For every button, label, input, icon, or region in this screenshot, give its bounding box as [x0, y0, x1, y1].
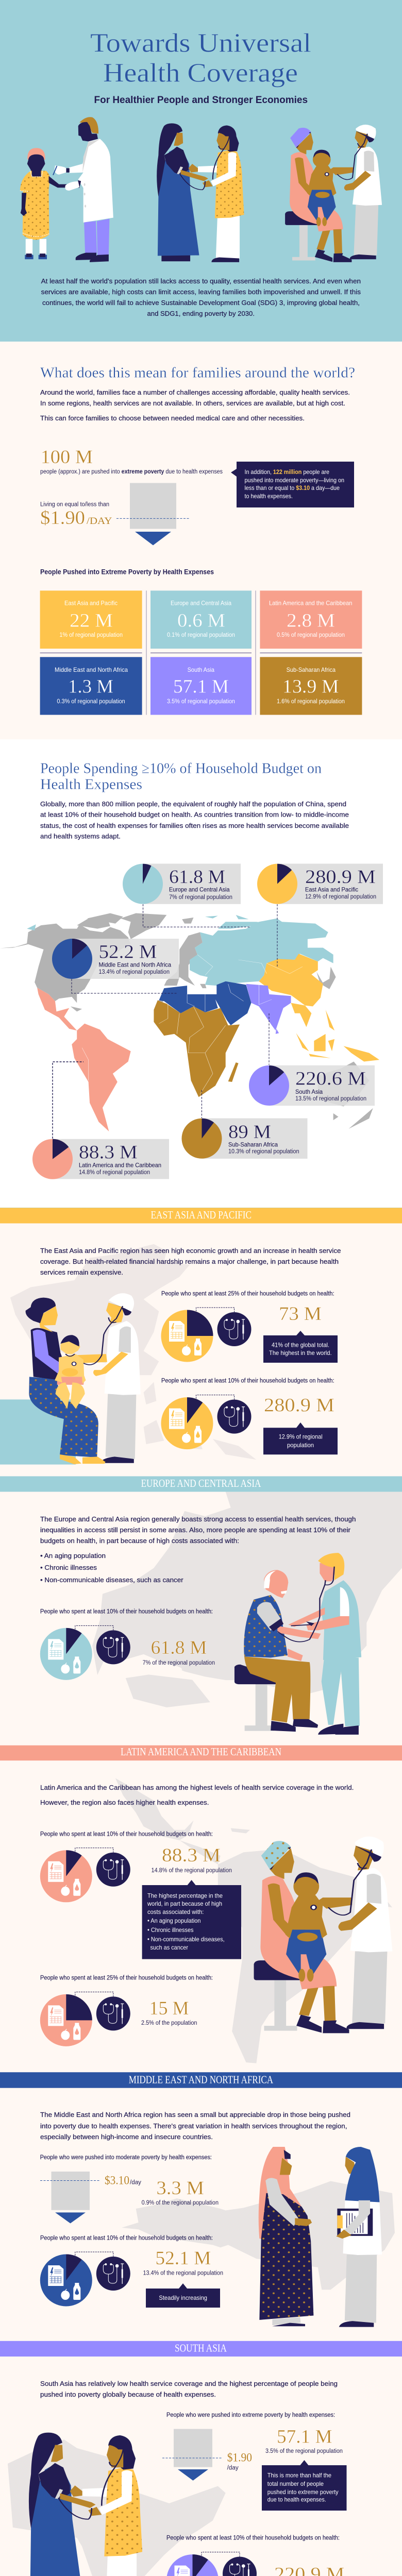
tile: Europe and Central Asia: 0.1% of regional population	[167, 632, 235, 638]
body text: The Europe and Central Asia region generally boasts strong access to essential health services, though	[40, 1515, 356, 1523]
callout: Latin America and the Caribbean: 14.8% of regional population	[79, 1170, 150, 1176]
stat: 100 M: people (approx.) are pushed into extreme poverty due to health expenses	[40, 469, 223, 475]
body text: at least 10% of their household budget on health. As countries transition from low- to middle-income	[40, 811, 349, 819]
callout: East Asia and Pacific: 12.9% of regional population	[305, 894, 376, 900]
callout: more than half	[262, 2460, 346, 2511]
body text: pushed into poverty globally because of health expenses.	[40, 2391, 216, 2398]
tile: Europe and Central Asia	[150, 590, 252, 649]
body text: This can force families to choose between needed medical care and other necessities.	[40, 414, 305, 422]
banner: MIDDLE EAST AND NORTH AFRICA	[129, 2073, 274, 2086]
stat: 100 M: 100 M	[41, 447, 93, 468]
pie: 10 percent	[40, 1848, 130, 1902]
poverty line graphic	[162, 2429, 252, 2481]
bullet list	[40, 1552, 183, 1584]
callout: Sub-Saharan Africa: 89 M	[228, 1122, 271, 1143]
stat: 61.8 M: 61.8 M	[150, 1637, 207, 1658]
panel: Latin America and the Caribbean	[0, 1745, 402, 2063]
pie: 10 percent	[40, 1625, 130, 1680]
stat label: 25 percent: People who spent at least 25% of their household budgets on health:	[40, 1975, 213, 1981]
poverty line graphic	[40, 483, 190, 545]
heading: People Spending ≥10% of Household Budget on	[40, 760, 322, 776]
poverty line graphic: $1.90	[40, 507, 85, 529]
banner: EAST ASIA AND PACIFIC	[150, 1209, 252, 1221]
tile: Middle East and North Africa: Middle East and North Africa	[55, 666, 128, 673]
callout: Sub-Saharan Africa: 10.3% of regional population	[228, 1149, 299, 1155]
callout: Sub-Saharan Africa: Sub-Saharan Africa	[228, 1141, 278, 1148]
banner: SOUTH ASIA	[175, 2342, 227, 2354]
callout: Sub-Saharan Africa	[181, 1118, 307, 1159]
stat label: 10 percent: People who spent at least 10% of their household budgets on health:	[166, 2535, 340, 2541]
stat label: 10 percent: People who spent at least 10% of their household budgets on health:	[40, 2235, 213, 2242]
subheading: extreme poverty by region: People Pushed into Extreme Poverty by Health Expenses	[40, 568, 214, 576]
body text	[40, 2380, 338, 2398]
tile: East Asia and Pacific: 22 M	[70, 610, 113, 631]
tile: Sub-Saharan Africa: 13.9 M	[282, 676, 339, 698]
illustration: pregnant woman and health worker	[259, 2147, 382, 2327]
panel: what does this mean	[0, 342, 402, 739]
callout: global total: 41% of the global total.	[272, 1342, 329, 1349]
stat: 52.1 M	[143, 2248, 223, 2277]
body text	[40, 1515, 356, 1545]
stat: 88.3 M: 14.8% of the regional population	[152, 1868, 232, 1874]
callout: East Asia and Pacific	[257, 863, 383, 904]
body text: South Asia has relatively low health service coverage and the highest percentage of people being	[40, 2380, 338, 2387]
world map	[0, 913, 379, 1131]
intro text: services are available, high costs can limit access, leaving families both impoverished and unwell. If this	[41, 288, 361, 296]
tile: Middle East and North Africa: 1.3 M	[68, 676, 113, 698]
stat: 3.3 M: 0.9% of the regional population	[142, 2200, 219, 2206]
banner	[0, 1745, 402, 1760]
tile: Latin America and the Caribbean	[260, 590, 362, 649]
banner: EUROPE AND CENTRAL ASIA	[141, 1477, 261, 1489]
tile: Sub-Saharan Africa: 1.6% of regional population	[277, 699, 345, 705]
callout: South Asia: 13.5% of regional population	[295, 1096, 366, 1102]
stat label: 10 percent: People who spent at least 10% of their household budgets on health:	[40, 1609, 213, 1615]
heading: What does this mean for families around the world?	[40, 365, 355, 381]
body text	[40, 2111, 350, 2141]
body text: coverage. But health-related financial hardship remains a major challenge, in part because health	[40, 1258, 339, 1265]
stat: 3.3 M: 3.3 M	[156, 2178, 204, 2199]
banner	[0, 1476, 402, 1492]
poverty line graphic: Living on equal to/less than	[40, 502, 109, 508]
callout: South Asia: 220.6 M	[295, 1068, 366, 1089]
callout: Europe and Central Asia: 61.8 M	[169, 867, 225, 888]
callout: regional population: 12.9% of regional	[279, 1433, 323, 1440]
panel: East Asia and Pacific	[0, 1208, 402, 1465]
intro text	[41, 277, 361, 317]
intro text: and SDG1, ending poverty by 2030.	[147, 310, 255, 317]
intro text: continues, the world will fail to achieve Sustainable Development Goal (SDG) 3, improving global health,	[42, 299, 360, 307]
callout: Latin America and the Caribbean: Latin America and the Caribbean	[79, 1162, 161, 1169]
callout: highest percentage: • An aging population	[147, 1917, 201, 1924]
stat: 52.1 M: 52.1 M	[155, 2248, 211, 2269]
callout: more than half: pushed into extreme poverty	[267, 2488, 339, 2496]
callout: highest percentage: world, in part because of high	[147, 1900, 222, 1907]
map: Latin America	[115, 1778, 392, 2063]
banner: LATIN AMERICA AND THE CARIBBEAN	[121, 1745, 281, 1758]
body text	[40, 388, 350, 422]
callout: highest percentage	[142, 1880, 241, 1959]
intro text: At least half the world's population still lacks access to quality, essential health services. And even when	[41, 277, 361, 285]
tile: Sub-Saharan Africa	[260, 657, 362, 715]
heading: Health Expenses	[40, 776, 142, 792]
regional sections background	[0, 1223, 402, 2576]
panel: South Asia	[0, 2341, 402, 2576]
callout: global total: The highest in the world.	[269, 1349, 332, 1357]
panel: Middle East and North Africa	[0, 2072, 402, 2327]
stat label: moderate poverty: People who were pushed into moderate poverty by health expenses:	[40, 2155, 212, 2161]
pie: 10 percent	[166, 2552, 257, 2576]
map: Middle East	[122, 2181, 395, 2290]
tile: South Asia	[150, 657, 252, 715]
callout: Europe and Central Asia: 7% of regional population	[169, 894, 232, 901]
callout: 122 million	[231, 462, 354, 507]
callout: Europe and Central Asia	[123, 863, 241, 904]
poverty line graphic: /day	[227, 2465, 239, 2471]
stat: 15 M	[141, 1998, 197, 2026]
callout: South Asia: South Asia	[295, 1088, 323, 1095]
body text: The East Asia and Pacific region has seen high economic growth and an increase in health service	[40, 1247, 341, 1255]
callout: steadily increasing: Steadily increasing	[159, 2294, 207, 2301]
bullet list: • Chronic illnesses	[40, 1564, 97, 1571]
map: East Asia	[10, 1244, 256, 1460]
body text	[40, 1247, 341, 1276]
callout: 122 million: less than or equal to $3.10 a day—due	[244, 484, 340, 492]
callout: regional population	[263, 1422, 338, 1454]
stat: 57.1 M	[265, 2427, 343, 2454]
tile: Middle East and North Africa: 0.3% of regional population	[57, 699, 125, 705]
body text: status, the cost of health expenses for families often rises as more health services become available	[40, 822, 349, 829]
callout: East Asia and Pacific: East Asia and Pacific	[305, 886, 358, 893]
body text: services remain expensive.	[40, 1268, 123, 1276]
connector lines	[53, 904, 277, 1139]
poverty line graphic: $3.10	[105, 2174, 129, 2187]
body text: especially between high-income and insecure countries.	[40, 2133, 213, 2141]
stat: 61.8 M: 7% of the regional population	[143, 1660, 215, 1666]
callout: highest percentage: such as cancer	[150, 1944, 188, 1951]
panel: people spending 10 percent	[0, 739, 402, 1208]
bullet list: • Non-communicable diseases, such as cancer	[40, 1576, 183, 1584]
tile: East Asia and Pacific: East Asia and Pacific	[64, 600, 118, 607]
body text: Around the world, families face a number of challenges accessing affordable, quality health services.	[40, 388, 350, 396]
body text: budgets on health, in part because of high costs associated with:	[40, 1537, 239, 1545]
tile: South Asia: 3.5% of regional population	[167, 699, 235, 705]
stat: 61.8 M	[143, 1637, 215, 1666]
callout: regional population: population	[287, 1442, 314, 1449]
title	[90, 28, 311, 88]
body text	[40, 1784, 354, 1806]
callout: highest percentage: The highest percentage in the	[147, 1892, 223, 1899]
poverty line graphic: /DAY	[87, 516, 112, 527]
body text: Globally, more than 800 million people, the equivalent of roughly half the population of China, spend	[40, 800, 346, 808]
heading	[40, 760, 322, 792]
subtitle: For Healthier People and Stronger Economies	[94, 95, 308, 106]
stat: 15 M: 15 M	[149, 1998, 189, 2019]
panel: Europe and Central Asia	[0, 1476, 402, 1735]
body text: into poverty due to health expenses. There's great variation in health services throughout the region,	[40, 2122, 347, 2130]
banner	[0, 2341, 402, 2357]
stat label: extreme poverty: People who were pushed into extreme poverty by health expenses:	[166, 2412, 335, 2418]
banner	[0, 2072, 402, 2088]
stat label: 25 percent: People who spent at least 25% of their household budgets on health:	[161, 1291, 334, 1297]
stat: 88.3 M: 88.3 M	[162, 1845, 221, 1866]
callout: 122 million: In addition, 122 million people are	[244, 468, 329, 476]
tile: Europe and Central Asia: Europe and Central Asia	[171, 600, 231, 607]
callout: Middle East and North Africa: Middle East and North Africa	[99, 961, 171, 969]
stat label: 10 percent: People who spent at least 10% of their household budgets on health:	[161, 1378, 334, 1384]
panel: hero	[0, 0, 402, 342]
illustration: mother, baby and doctor	[254, 1837, 392, 2033]
tile: Europe and Central Asia: 0.6 M	[177, 610, 225, 631]
map: Europe	[92, 1492, 402, 1707]
title: Health Coverage	[103, 59, 298, 88]
banner	[0, 1208, 402, 1223]
tile: Latin America and the Caribbean: Latin America and the Caribbean	[269, 600, 352, 607]
illustration: older man and doctor	[234, 1553, 361, 1735]
poverty line graphic	[40, 2172, 141, 2224]
stat: 100 M	[40, 447, 223, 475]
callout: Middle East and North Africa: 52.2 M	[99, 942, 157, 963]
tile: East Asia and Pacific	[40, 590, 142, 649]
callout: more than half: due to health expenses.	[267, 2496, 326, 2503]
tile: Middle East and North Africa	[40, 657, 142, 715]
callout: global total	[263, 1331, 338, 1363]
bullet list: • An aging population	[40, 1552, 106, 1560]
callout: Europe and Central Asia: Europe and Central Asia	[169, 886, 230, 893]
illustration: woman and health worker	[29, 2433, 142, 2576]
body text: inequalities in access still persist in some areas. Also, more people are spending at least 10% of their	[40, 1526, 351, 1534]
callout: Latin America and the Caribbean: 88.3 M	[79, 1142, 138, 1163]
illustration: mother, baby and doctor	[0, 1293, 141, 1465]
tile: South Asia: South Asia	[188, 666, 214, 673]
tile: Latin America and the Caribbean: 0.5% of regional population	[277, 632, 345, 638]
body text	[40, 800, 349, 840]
callout: highest percentage: costs associated with:	[147, 1908, 204, 1916]
stat label: 10 percent: People who spent at least 10% of their household budgets on health:	[40, 1831, 213, 1837]
map: South Asia	[8, 2439, 226, 2576]
pie: 10 percent	[161, 1395, 252, 1449]
stat: 52.1 M: 13.4% of the regional population	[143, 2270, 223, 2277]
stat: 57.1 M: 57.1 M	[277, 2427, 332, 2448]
stat: 15 M: 2.5% of the population	[141, 2020, 197, 2026]
body text: In some regions, health services are not available. In others, services are available, but at high cost.	[40, 399, 345, 407]
illustration: mother, baby and doctor	[285, 125, 382, 262]
callout: highest percentage: • Chronic illnesses	[147, 1926, 194, 1934]
body text: and health systems adapt.	[40, 833, 121, 840]
callout: Middle East and North Africa	[52, 939, 179, 979]
callout: more than half: total number of people	[267, 2480, 324, 2487]
pie: 25 percent	[161, 1308, 252, 1362]
illustration: child and doctor	[20, 117, 113, 262]
poverty line graphic: /day	[130, 2179, 141, 2185]
callout: Middle East and North Africa: 13.4% of regional population	[99, 969, 170, 975]
stat: 88.3 M	[152, 1845, 232, 1874]
callout: 122 million: to health expenses.	[244, 493, 293, 500]
callout: highest percentage: • Non-communicable diseases,	[147, 1936, 225, 1943]
callout: steadily increasing	[146, 2283, 220, 2308]
callout: East Asia and Pacific: 280.9 M	[305, 867, 376, 888]
stat: 73 M: 73 M	[279, 1303, 322, 1325]
illustration: woman and health worker	[157, 123, 244, 262]
body text: The Middle East and North Africa region has seen a small but appreciable drop in those being pushed	[40, 2111, 350, 2119]
stat: 3.3 M	[142, 2178, 219, 2206]
pie: 10 percent	[40, 2252, 130, 2306]
tile: South Asia: 57.1 M	[173, 676, 229, 698]
callout: South Asia	[249, 1065, 375, 1106]
stat: 280.9 M: 280.9 M	[264, 1395, 334, 1416]
pie: 25 percent	[40, 1992, 130, 2046]
body text: Latin America and the Caribbean has among the highest levels of health service coverage in the world.	[40, 1784, 354, 1791]
callout: 122 million: pushed into moderate poverty—living on	[244, 477, 344, 484]
stat: 57.1 M: 3.5% of the regional population	[265, 2448, 343, 2454]
tile: Sub-Saharan Africa: Sub-Saharan Africa	[287, 666, 336, 673]
body text: However, the region also faces higher health expenses.	[40, 1799, 209, 1806]
poverty line graphic: $1.90	[227, 2451, 252, 2464]
tile: East Asia and Pacific: 1% of regional population	[59, 632, 123, 638]
tile: Latin America and the Caribbean: 2.8 M	[287, 610, 335, 631]
callout: more than half: This is more than half the	[267, 2472, 331, 2479]
callout: Latin America and the Caribbean	[32, 1139, 169, 1179]
title: Towards Universal	[90, 28, 311, 58]
